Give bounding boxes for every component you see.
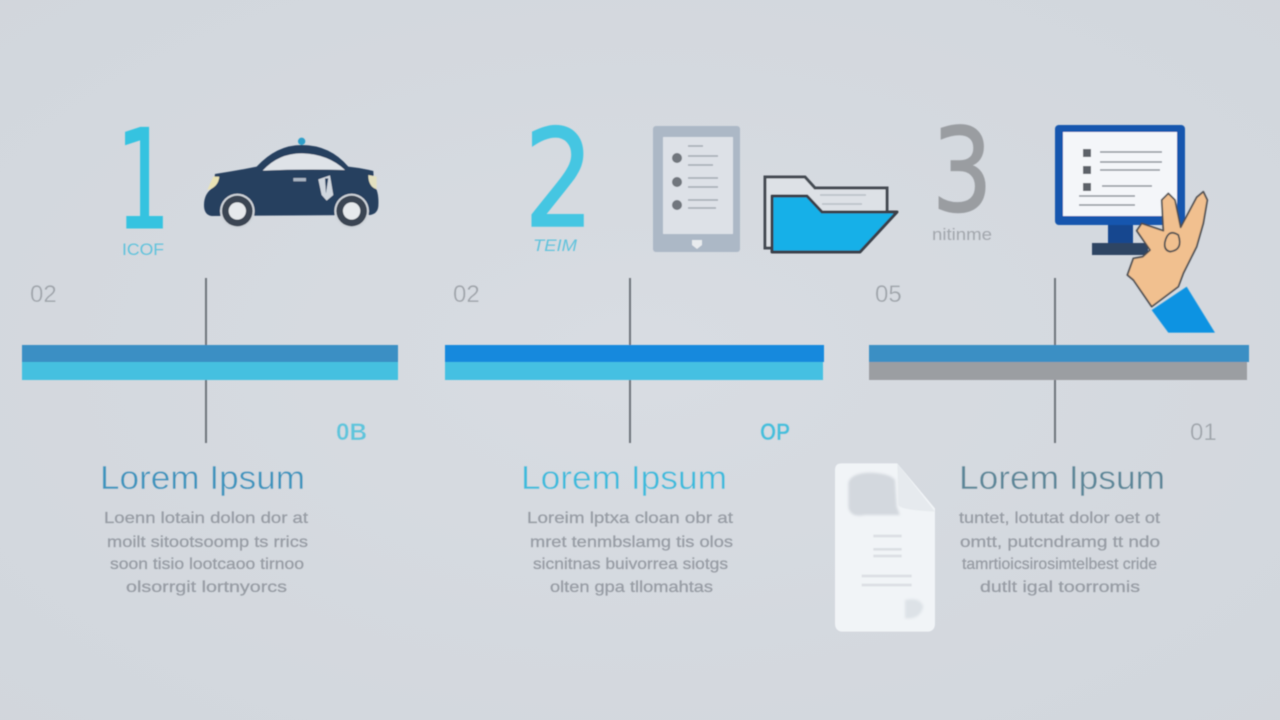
- text block 2: mret tenmbslamg tis olos: [530, 534, 733, 551]
- text block 2: Loreim lptxa cloan obr at: [527, 510, 734, 527]
- timeline bar 1: [22, 345, 398, 380]
- text block 1: soon tisio lootcaoo tirnoo: [110, 556, 304, 573]
- step 2 label: TEIM: [533, 236, 578, 255]
- icon: car: [204, 138, 378, 228]
- text block 1: [104, 510, 309, 596]
- vertical tick 2: [629, 278, 631, 443]
- text block 3: tuntet, lotutat dolor oet ot: [959, 510, 1161, 527]
- top scale value 3: 05: [875, 281, 902, 308]
- bottom scale value 2: OP: [760, 419, 790, 446]
- heading 3: Lorem Ipsum: [959, 459, 1165, 496]
- text block 1: Loenn lotain dolon dor at: [104, 510, 309, 527]
- icon: monitor: [1055, 125, 1185, 255]
- step 3 label: nitinme: [932, 225, 992, 244]
- vertical tick 1: [205, 278, 207, 443]
- text block 3: dutlt igal toorromis: [980, 579, 1140, 596]
- top scale value 1: 02: [30, 281, 57, 308]
- heading 1: Lorem Ipsum: [100, 459, 305, 496]
- text block 3: [959, 510, 1161, 596]
- step 2 number: 2: [524, 101, 594, 259]
- icon: faded document: [835, 463, 935, 632]
- timeline bar 3: [869, 345, 1249, 380]
- heading 2: Lorem Ipsum: [521, 459, 727, 496]
- text block 3: omtt, putcndramg tt ndo: [960, 534, 1160, 551]
- text block 2: olten gpa tllomahtas: [550, 579, 713, 596]
- top scale value 2: 02: [453, 281, 480, 308]
- bottom scale value 1: 0B: [336, 419, 367, 446]
- step 3 number: 3: [932, 105, 993, 239]
- text block 1: olsorrgit lortnyorcs: [126, 579, 287, 596]
- text block 1: moilt sitootsoomp ts rrics: [107, 534, 308, 551]
- bottom scale value 3: 01: [1190, 419, 1217, 446]
- icon: tablet: [653, 126, 740, 252]
- text block 2: sicnitnas buivorrea siotgs: [533, 556, 728, 573]
- icon: hand with blue sleeve: [1127, 192, 1215, 333]
- text block 3: tamrtioicsirosimtelbest cride: [962, 556, 1157, 573]
- icon: folder: [765, 177, 897, 252]
- text block 2: [527, 510, 734, 596]
- vertical tick 3: [1054, 278, 1056, 443]
- step 1 number: 1: [116, 101, 170, 262]
- step 1 label: ICOF: [122, 240, 164, 259]
- timeline bar 2: [445, 345, 824, 380]
